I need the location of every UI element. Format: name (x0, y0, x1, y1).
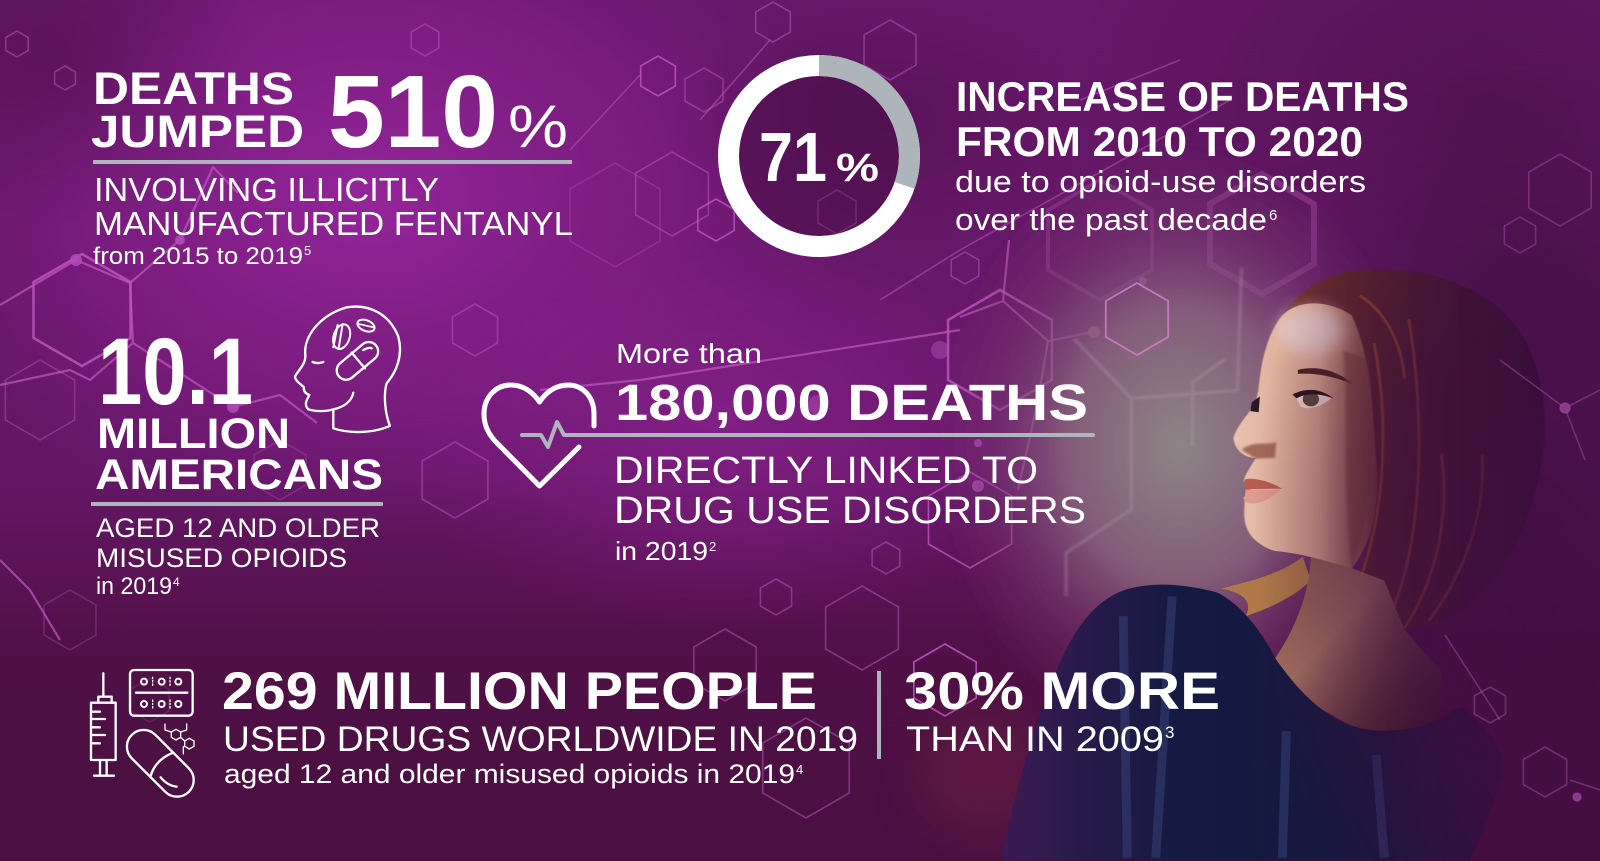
stat text: increase of deaths: due to opioid-use disorders (955, 164, 1366, 199)
stat: more than 180,000 deaths: 180,000 DEATHS (615, 374, 1088, 431)
icon: heart with pulse line (484, 385, 1093, 486)
stat text: increase of deaths: INCREASE OF DEATHS (956, 73, 1409, 120)
stat: more than 180,000 deaths: DIRECTLY LINKED TO (614, 450, 1038, 492)
stat: donut 71% (728, 66, 910, 246)
stat: 269 million people: 4 (796, 762, 803, 777)
stat: 10.1 million Americans: AGED 12 AND OLDER (96, 513, 380, 543)
molecules on the right side (1445, 154, 1600, 801)
stat: 10.1 million Americans: 4 (173, 575, 180, 589)
face (1233, 303, 1377, 569)
hair (1262, 269, 1545, 631)
neck (1274, 553, 1441, 735)
divider (877, 671, 881, 759)
bright hexagon beside the face (1106, 283, 1168, 355)
stat: deaths jumped 510%: MANUFACTURED FENTANYL (94, 205, 573, 242)
stat: 10.1 million Americans: MILLION (97, 410, 290, 458)
stat: deaths jumped 510%: % (508, 93, 568, 160)
stat: 269 million people: 269 MILLION PEOPLE (222, 662, 817, 721)
stat: 30% more: THAN IN 2009 (906, 720, 1164, 759)
molecule network pattern (0, 2, 1314, 818)
stat: 10.1 million Americans: MISUSED OPIOIDS (96, 543, 347, 573)
stat: 269 million people: aged 12 and older misused opioids in 2019 (224, 759, 795, 789)
stat: 30% more (904, 662, 1220, 759)
stat text: increase of deaths: FROM 2010 TO 2020 (956, 118, 1363, 165)
stat text: increase of deaths: 6 (1269, 207, 1277, 224)
stat: deaths jumped 510%: JUMPED (91, 106, 304, 157)
stat: 10.1 million Americans (91, 319, 383, 600)
stat: 269 million people (222, 662, 858, 789)
stat: 269 million people: USED DRUGS WORLDWIDE IN 2019 (223, 720, 858, 759)
stat: deaths jumped 510% (91, 54, 573, 270)
stat: more than 180,000 deaths: in 2019 (615, 536, 708, 566)
icon: syringe, blister pack, capsule, molecule (91, 670, 201, 804)
stat: 10.1 million Americans: 10.1 (98, 319, 253, 425)
stat text: increase of deaths: over the past decade (955, 202, 1267, 237)
stat: deaths jumped 510%: INVOLVING ILLICITLY (94, 171, 439, 208)
stat: donut 71%: 71 (759, 118, 827, 196)
photo: woman in profile (919, 145, 1545, 861)
stat: more than 180,000 deaths (614, 338, 1088, 566)
molecule nodes (70, 235, 1147, 492)
stat: 30% more: 30% MORE (904, 662, 1220, 721)
icon: head with pills (295, 307, 400, 432)
dark fade right of the figure (1150, 60, 1600, 861)
stat: deaths jumped 510%: 510 (328, 54, 498, 169)
stat: more than 180,000 deaths: DRUG USE DISORDERS (614, 490, 1086, 532)
stat: deaths jumped 510%: DEATHS (93, 63, 294, 114)
sweater (1001, 585, 1503, 861)
stat: 10.1 million Americans: in 2019 (96, 573, 172, 600)
facial features (1242, 351, 1372, 569)
stat: 10.1 million Americans: AMERICANS (95, 451, 383, 499)
stat: deaths jumped 510%: from 2015 to 2019 (93, 243, 303, 270)
stat: donut 71%: % (836, 146, 879, 190)
stat: more than 180,000 deaths: More than (616, 338, 762, 369)
stat: deaths jumped 510%: 5 (304, 243, 311, 258)
stat: more than 180,000 deaths: 2 (709, 539, 716, 554)
stat: 30% more: 3 (1165, 723, 1174, 742)
stat text: increase of deaths (955, 73, 1409, 237)
